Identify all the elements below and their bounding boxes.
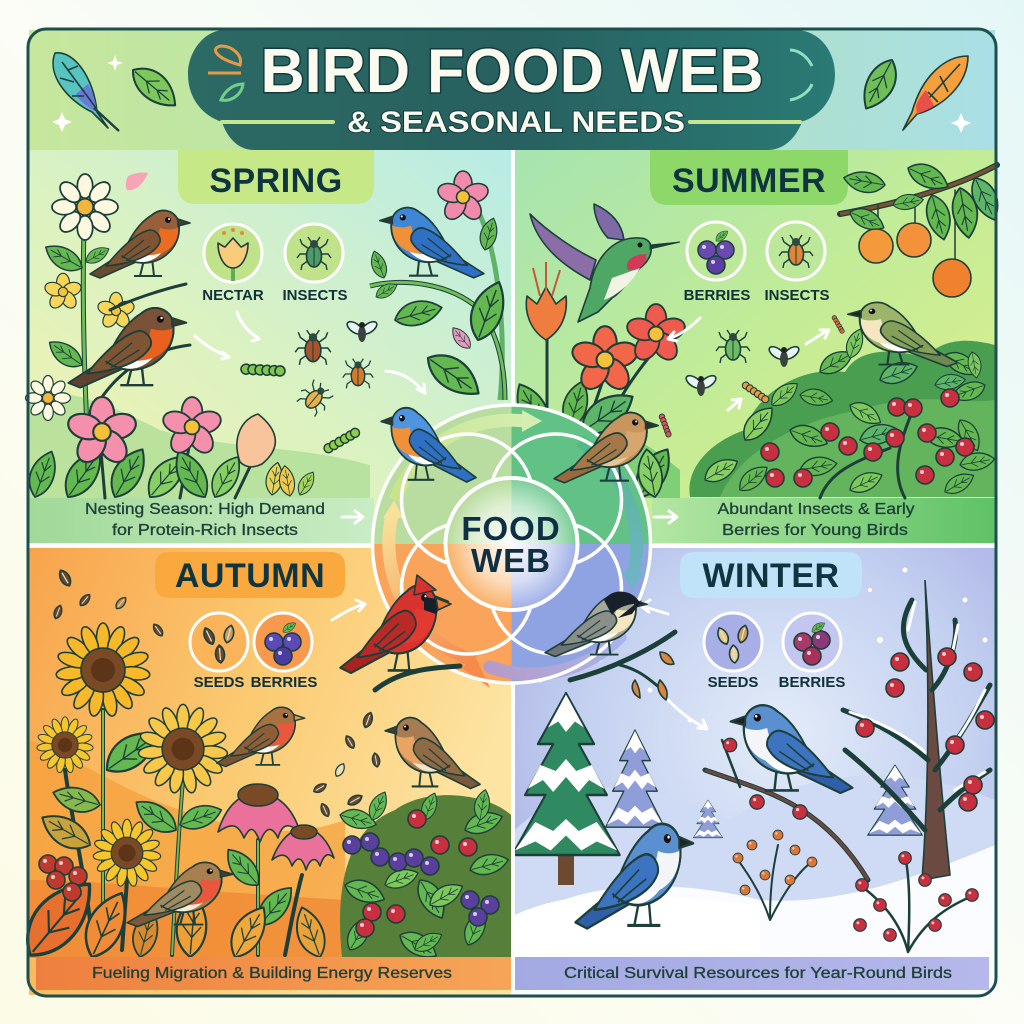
bird: autumn bird upper [217,707,305,767]
summer caption strip: Abundant Insects & Early [718,501,914,518]
label: insects (summer): INSECTS [764,287,830,304]
bird: lower robin [68,308,186,388]
season label: winter [680,552,862,598]
season label: winter: WINTER [702,557,840,595]
food web label: FOOD [461,510,561,547]
snowflakes [538,568,988,942]
season label: spring [178,150,374,204]
bird: autumn bird right [385,718,480,788]
label: berries (autumn): BERRIES [251,674,317,691]
season label: summer: SUMMER [672,162,826,200]
panel: winter [515,548,995,995]
icon: insects (spring) [285,224,343,282]
bird: sparrow with caterpillar [554,413,672,483]
label: seeds (autumn): SEEDS [194,674,244,691]
sunflowers and autumn plants [12,623,334,968]
cycle arrows [389,420,637,674]
bird: summer warbler [831,302,958,366]
season label: autumn: AUTUMN [175,557,325,595]
insects: spring [241,319,379,454]
summer plants left [508,262,688,503]
label: nectar: NECTAR [202,287,264,304]
orange tree branch [840,158,1005,297]
bird: spring bluebird lower [381,408,476,482]
spring caption strip: Nesting Season: High Demand [85,501,325,518]
title text: BIRD FOOD WEB [260,37,764,106]
bird: blue jay lower [575,824,693,928]
spring plants right [367,171,512,405]
quadrant dividers [29,150,995,995]
label: insects (spring): INSECTS [282,287,348,304]
icon: right leaf [855,54,904,115]
icon: left leaf [125,59,184,115]
branch under chickadee [570,632,675,700]
season label: summer [650,150,848,205]
winter shrubs [733,830,978,952]
panel: autumn [29,548,511,995]
winter caption strip: Critical Survival Resources for Year-Round Birds [564,965,952,982]
panel: spring [29,150,511,544]
bird: cardinal [340,575,451,673]
spring plants left [23,172,318,505]
food web diagram [372,405,650,688]
label: berries (winter): BERRIES [779,674,845,691]
icon: insects (summer) [767,222,825,280]
bare winter tree [843,580,994,880]
spring caption strip [29,498,374,543]
arrows: summer [654,318,829,523]
spring caption strip: for Protein-Rich Insects [112,522,298,539]
insects: summer [684,330,801,404]
panel: summer [515,150,995,544]
branch under cardinal [375,666,460,690]
bush: summer berries [689,326,996,498]
season label: autumn [155,552,345,598]
subtitle text: & SEASONAL NEEDS [347,106,685,139]
icon: berries (winter) [783,613,841,671]
autumn caption strip: Fueling Migration & Building Energy Reserves [92,965,452,982]
icon: nectar [204,224,262,282]
label: seeds (winter): SEEDS [708,674,758,691]
icon: blue feather [53,53,119,131]
summer caption strip: Berries for Young Birds [722,522,908,539]
branch with jay [705,705,868,880]
icon: berries (summer) [687,222,745,280]
label: berries (summer): BERRIES [684,287,750,304]
bird: spring bluebird upper [380,208,484,278]
icon: berries (autumn) [254,613,312,671]
season label: spring: SPRING [209,162,343,200]
summer caption strip [652,498,995,543]
icon: seeds (autumn) [190,613,248,671]
winter caption strip [515,957,989,990]
food web label [461,510,561,579]
icon: seeds (winter) [704,613,762,671]
food web label: WEB [471,542,551,579]
bird: chickadee [545,592,647,656]
seeds scattered autumn [52,568,381,818]
autumn caption strip [36,957,511,990]
arrows: autumn and winter [332,600,707,729]
icon: orange feather [903,56,968,130]
bird: sparrow (top layer) [554,413,658,483]
winter trees [512,693,922,960]
berry bush: autumn [338,788,511,964]
bird: upper robin [90,210,190,278]
arrows: spring [195,312,425,523]
bird: hummingbird [530,204,680,322]
title banner [188,30,835,150]
header band [29,30,995,150]
bird: autumn bird lower [127,862,233,926]
